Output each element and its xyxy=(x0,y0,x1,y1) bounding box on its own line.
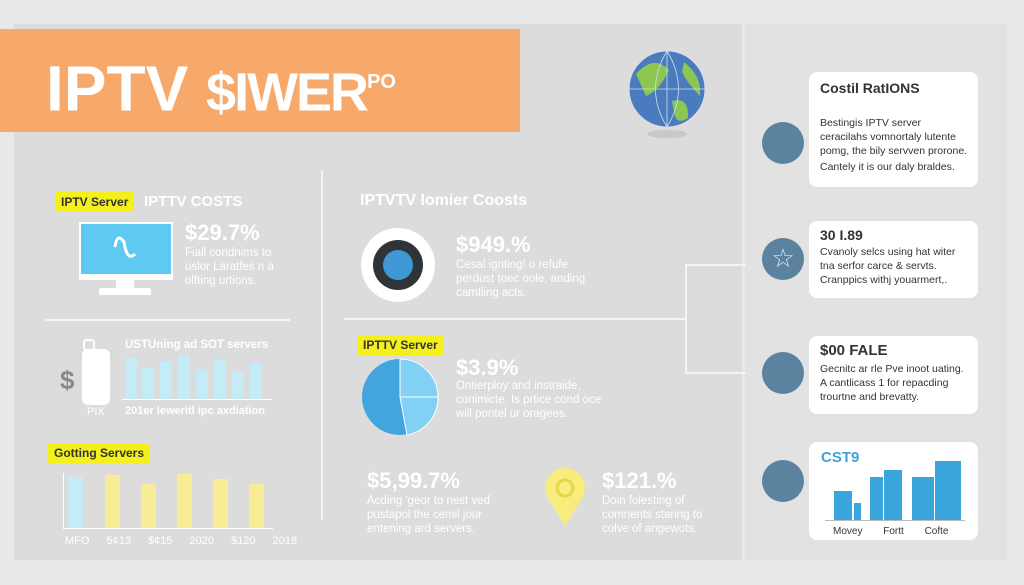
chart: Gotting Servers xyxy=(48,443,297,547)
card: 30 I.89: 30 I.89 xyxy=(820,227,863,243)
main panel xyxy=(14,24,742,560)
card: CST9 chart: CST9 xyxy=(821,449,859,466)
icon: money circle xyxy=(762,352,804,394)
icon: disc xyxy=(361,228,435,302)
chart: USTUning servers: USTUning ad SOT servers xyxy=(125,339,268,351)
text: entening ard servers. xyxy=(367,523,475,535)
chart: Gotting Servers: MFO 5¢13 $¢15 2020 $120 2018 xyxy=(65,535,297,547)
divider vertical xyxy=(321,170,323,520)
icon: camera circle xyxy=(762,460,804,502)
panel: IPTVTV Iomier Coosts: camtling acts. xyxy=(456,287,526,299)
card: 30 I.89: Cvanoly selcs using hat witer xyxy=(820,246,955,258)
panel: IPTVTV Iomier Coosts: IPTVTV Iomier Coosts xyxy=(360,192,527,209)
panel: IPTVTV Iomier Coosts: Cesal ignting! o refufe xyxy=(456,259,568,271)
icon: star circle xyxy=(762,238,804,280)
card: Costil Rations: ceracilahs vomnortaly lutente xyxy=(820,131,956,143)
stat: $5,99.7%: pustapol the cemil jour xyxy=(367,509,482,521)
tag: IPTV Server: IPTV Server xyxy=(61,195,128,209)
card: CST9 chart: Movey Fortt Cofte xyxy=(833,526,948,537)
chart: USTUning servers: 201er leweritl ipc axdiation xyxy=(125,405,265,417)
icon: jar with dollar: $ xyxy=(60,365,75,395)
card: $00 FALE: $00 FALE xyxy=(820,342,888,359)
chart: USTUning servers: PIX xyxy=(87,406,105,418)
icon: jar with dollar xyxy=(60,339,110,405)
icon: monitor xyxy=(79,222,173,295)
panel: IPTVTV Iomier Coosts xyxy=(360,192,585,302)
stat: $5,99.7% xyxy=(367,468,490,535)
card: Costil Rations: Costil RatIONS xyxy=(820,80,920,96)
stat: $121.% xyxy=(602,468,702,535)
panel: IPTV server costs: Fiall condnims to xyxy=(185,247,271,259)
stat: $121.%: $121.% xyxy=(602,468,677,493)
icon: globe xyxy=(628,50,706,138)
pie chart xyxy=(362,358,438,436)
stat: $121.%: Doin folesting of xyxy=(602,495,684,507)
card: Costil Rations: Cantely it is our daly braldes. xyxy=(820,161,955,173)
card: 30 I.89: tna serfor carce & servts. xyxy=(820,260,937,272)
heading: IPTTV COSTS: IPTTV COSTS xyxy=(144,193,242,210)
title banner: IPTV $IWERPO xyxy=(46,52,396,124)
panel: IPTV server costs: uslor Laratfes n a xyxy=(185,261,274,273)
icon: star circle: ☆ xyxy=(771,243,795,273)
connector lines xyxy=(685,264,746,374)
stat: $121.%: comnents staring to xyxy=(602,509,702,521)
panel: IPTTV Server pie: will pontel ur oragees. xyxy=(456,408,568,420)
stat: $5,99.7%: $5,99.7% xyxy=(367,468,460,493)
panel: IPTTV Server pie xyxy=(357,335,601,436)
chart: USTUning servers xyxy=(60,339,272,418)
card: $00 FALE: Gecnitc ar rle Pve inoot uating. xyxy=(820,363,964,375)
card: 30 I.89: Cranppics withj youarmert,. xyxy=(820,274,947,286)
card: $00 FALE: trourtne and brevatty. xyxy=(820,391,919,403)
panel: IPTV server costs xyxy=(55,192,274,295)
card: $00 FALE: A cantlicass 1 for repacding xyxy=(820,377,948,389)
panel: IPTTV Server pie: conimicte. Is prtice cond oce xyxy=(456,394,601,406)
right column panel xyxy=(745,24,1007,560)
text: colve of angewots. xyxy=(602,523,697,535)
card: $00 FALE xyxy=(809,336,978,414)
card: Costil Rations: pomg, the bily servven prorone. xyxy=(820,145,967,157)
panel: IPTTV Server pie: IPTTV Server xyxy=(363,338,438,352)
card: 30 I.89 xyxy=(809,221,978,298)
panel: IPTVTV Iomier Coosts: perdust toec oole, anding xyxy=(456,273,585,285)
panel: IPTTV Server pie: $3.9% xyxy=(456,355,518,380)
panel: IPTVTV Iomier Coosts: $949.% xyxy=(456,232,531,257)
panel: IPTV server costs: olfting urtions. xyxy=(185,275,257,287)
tag: IPTV Server xyxy=(55,192,134,212)
stat: $29.7%: $29.7% xyxy=(185,220,260,245)
chart: Gotting Servers: Gotting Servers xyxy=(54,446,144,460)
icon: location pin xyxy=(545,468,585,526)
card: Costil Rations: Bestingis IPTV server xyxy=(820,117,921,129)
card: Costil Rations xyxy=(809,72,978,187)
panel: IPTTV Server pie: Ontierploy and instraide, xyxy=(456,380,581,392)
stat: $5,99.7%: Acding 'geor to nest ved xyxy=(367,495,490,507)
card: CST9 chart xyxy=(809,442,978,540)
title banner xyxy=(0,29,520,132)
icon: flag circle xyxy=(762,122,804,164)
